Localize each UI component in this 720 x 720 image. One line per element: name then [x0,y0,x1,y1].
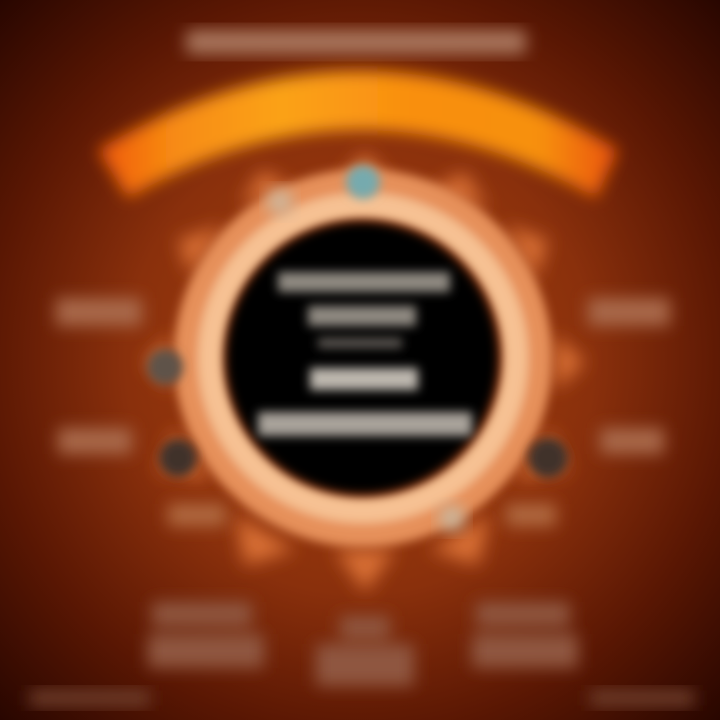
outer orange ring [191,186,535,530]
icon: upper left node [267,189,293,215]
right labels [506,298,670,526]
icon: lower inner node [439,505,465,531]
icon: left grey node [147,349,183,385]
left labels [56,298,226,526]
peach ring [211,206,515,510]
icon: lower right dark node [528,438,568,478]
gear ring [191,186,535,530]
banner arc [98,71,618,198]
title [186,30,526,54]
gear teeth [145,152,585,592]
bottom text blocks [148,602,578,686]
footer text [30,690,694,706]
central black disc [226,222,498,494]
icon: lower left dark node [159,439,197,477]
central text block [258,272,472,436]
icon: top teal node [346,165,380,199]
